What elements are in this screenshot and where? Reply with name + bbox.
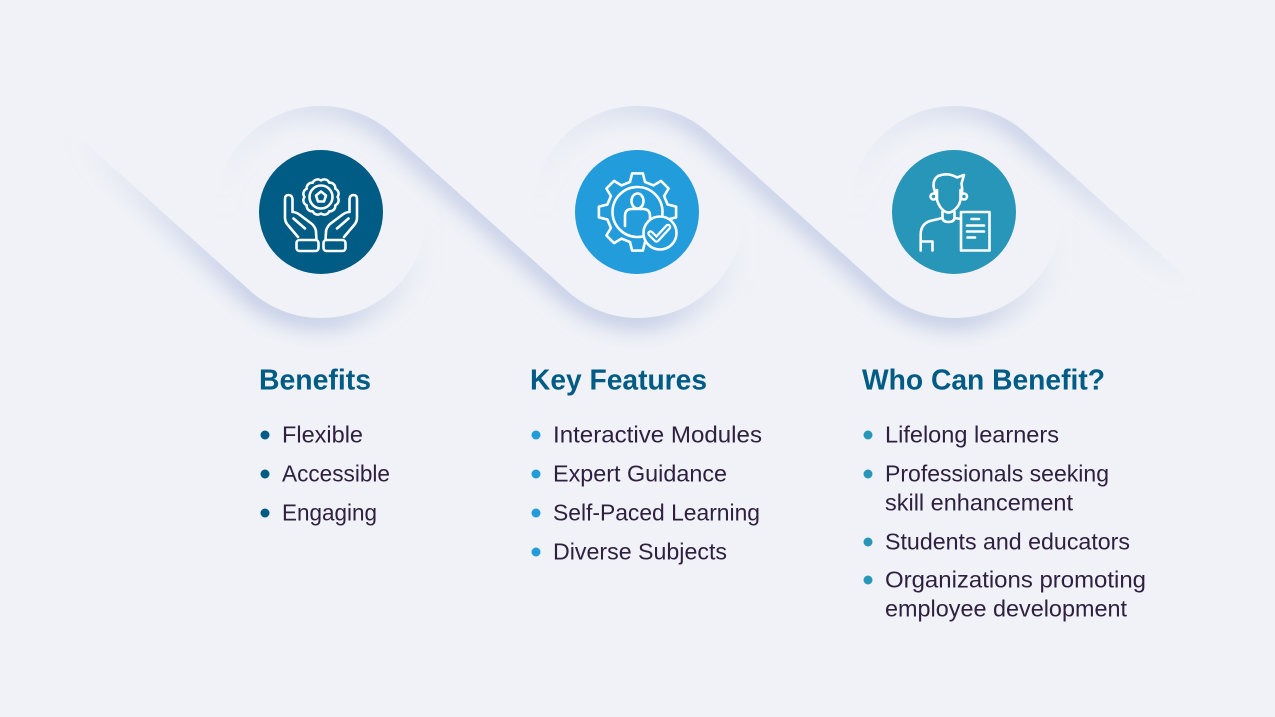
list: benefits: Accessible <box>282 460 390 486</box>
icon circle: key features <box>575 150 699 274</box>
list: who can benefit: skill enhancement <box>885 490 1074 516</box>
list: who can benefit: Students and educators <box>885 528 1130 554</box>
list: key features: Self-Paced Learning <box>553 500 760 526</box>
heading: key features: Key Features <box>530 364 707 396</box>
list: who can benefit: Professionals seeking <box>885 460 1109 486</box>
list: key features: Diverse Subjects <box>553 538 727 564</box>
list: benefits: Flexible <box>282 422 363 448</box>
list: key features: Expert Guidance <box>553 460 727 486</box>
list: who can benefit: Lifelong learners <box>885 422 1059 448</box>
heading: benefits: Benefits <box>259 364 371 396</box>
panel: who can benefit <box>862 150 1146 622</box>
panel: benefits <box>259 150 390 526</box>
icon: hands holding badge <box>285 179 357 251</box>
icon: person with document <box>921 174 990 250</box>
list: who can benefit <box>864 422 1146 622</box>
icon circle: benefits <box>259 150 383 274</box>
list: key features: Interactive Modules <box>553 422 762 448</box>
list: benefits <box>260 422 390 526</box>
icon circle: who can benefit <box>892 150 1016 274</box>
list: who can benefit: Organizations promoting <box>885 566 1146 592</box>
heading: who can benefit: Who Can Benefit? <box>862 364 1105 396</box>
list: who can benefit: employee development <box>885 596 1128 622</box>
list: key features <box>532 422 762 564</box>
neumorphic wave ribbon <box>80 106 1190 318</box>
panel: key features <box>530 150 762 564</box>
list: benefits: Engaging <box>282 500 377 526</box>
icon: gear with person and check <box>599 173 676 251</box>
